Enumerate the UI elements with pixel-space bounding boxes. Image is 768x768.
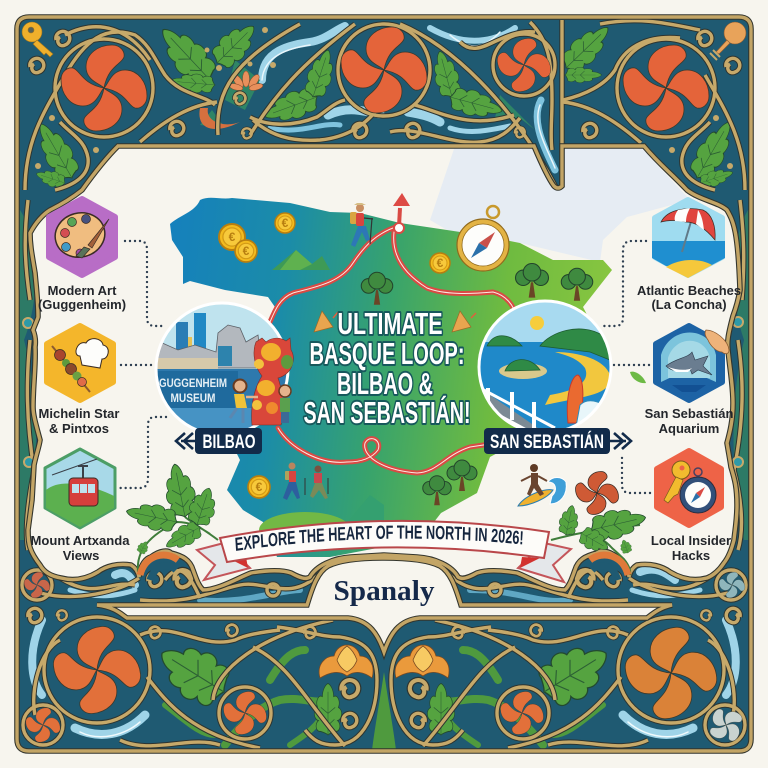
green mid tones bbox=[200, 60, 535, 130]
museum label: GUGGENHEIM bbox=[159, 378, 227, 390]
sea bbox=[480, 342, 610, 428]
side band beads bbox=[23, 317, 743, 467]
category labels: (Guggenheim) bbox=[38, 297, 126, 312]
sun bbox=[530, 316, 544, 330]
compass bbox=[694, 468, 702, 476]
panel: Bilbao circle bbox=[156, 303, 293, 439]
icon: compass bbox=[457, 206, 509, 271]
category labels: Hacks bbox=[672, 548, 710, 563]
orange flower scrolls on rail bbox=[140, 555, 628, 580]
brand name: Spanaly bbox=[334, 575, 435, 607]
icon: coins on the map: € bbox=[229, 230, 236, 244]
icon: mountains bbox=[259, 250, 384, 548]
title: SAN SEBASTIÁN! bbox=[304, 395, 470, 430]
map of the Basque region bbox=[170, 198, 612, 557]
shark bbox=[666, 352, 712, 375]
ribbon tails bbox=[197, 543, 250, 580]
beach bbox=[545, 352, 610, 405]
hex icon: beach bbox=[652, 200, 725, 278]
title: BASQUE LOOP: bbox=[310, 336, 464, 371]
gold beads bbox=[35, 27, 733, 169]
icon: coins on the map: € bbox=[256, 480, 263, 494]
key bbox=[672, 461, 690, 479]
pale sky behind the map bbox=[430, 146, 690, 262]
hex icon: insider hacks bbox=[657, 451, 721, 525]
label: San Sebastián bbox=[484, 428, 610, 454]
icon: orange flowers in bottom band bbox=[319, 645, 449, 678]
museum label: MUSEUM bbox=[170, 393, 216, 405]
small island bbox=[630, 372, 646, 383]
hex icon: aquarium bbox=[656, 326, 729, 400]
museum label bbox=[159, 378, 226, 402]
ribbon text: EXPLORE THE HEART OF THE NORTH IN 2026! bbox=[235, 526, 523, 551]
towers bbox=[176, 322, 188, 350]
category labels: Michelin Star bbox=[39, 406, 119, 421]
category labels: (La Concha) bbox=[651, 297, 727, 312]
Guggenheim building bbox=[156, 325, 262, 368]
green swooshes in the bottom band bbox=[165, 650, 603, 745]
icon: surfer bbox=[518, 464, 566, 506]
chef hat bbox=[76, 339, 108, 368]
oak branch right bbox=[551, 503, 649, 575]
arrow: right from San Sebastián bbox=[610, 433, 631, 449]
label: Bilbao: BILBAO bbox=[202, 432, 256, 453]
arrow: left from Bilbao bbox=[176, 433, 195, 449]
category labels: Mount Artxanda bbox=[30, 533, 130, 548]
icon: hiker bbox=[350, 203, 373, 247]
hex icon: pintxos bbox=[47, 326, 113, 400]
lower oak leaves bbox=[161, 648, 607, 748]
dotted connectors bbox=[120, 241, 650, 493]
category labels: San Sebastián bbox=[645, 406, 733, 421]
label: San Sebastián: SAN SEBASTIÁN bbox=[490, 431, 604, 453]
side band green tints bbox=[18, 210, 750, 540]
shell bbox=[705, 330, 729, 354]
hills bbox=[487, 336, 522, 346]
icon: corner key bbox=[22, 22, 53, 57]
icon: corner fork bbox=[710, 22, 746, 60]
route line bbox=[270, 226, 516, 473]
top oak leaves bbox=[29, 16, 741, 190]
palette bbox=[50, 207, 110, 263]
vines bbox=[25, 20, 745, 550]
brush bbox=[88, 219, 109, 248]
category labels: & Pintxos bbox=[49, 421, 109, 436]
icon: free lauburu flower bbox=[576, 472, 618, 514]
category labels: Modern Art bbox=[48, 283, 117, 298]
title: BILBAO & bbox=[337, 366, 433, 401]
skewer bbox=[52, 346, 90, 392]
red curved bud top centre bbox=[199, 108, 240, 129]
title: ULTIMATE bbox=[338, 306, 442, 341]
icon: coins on the map: € bbox=[282, 216, 289, 230]
Puppy flower bear bbox=[252, 338, 293, 425]
icon: coins on the map: € bbox=[243, 244, 250, 258]
icons: party poppers bbox=[314, 311, 476, 332]
icon: hikers bbox=[283, 462, 328, 500]
label: Bilbao bbox=[195, 428, 262, 454]
category labels: Local Insider bbox=[651, 533, 731, 548]
ribbon banner bbox=[195, 520, 573, 584]
hex icon: cable car bbox=[45, 449, 115, 528]
category labels: Atlantic Beaches bbox=[637, 283, 741, 298]
panel: San Sebastián circle bbox=[477, 301, 615, 434]
category labels bbox=[30, 283, 741, 563]
arrow: route heads north bbox=[393, 193, 410, 233]
title bbox=[304, 306, 470, 430]
hex icon: modern art bbox=[49, 199, 115, 275]
icon: trees bbox=[361, 264, 593, 505]
parasol bbox=[682, 218, 692, 252]
children bbox=[230, 380, 291, 423]
category labels: Views bbox=[63, 548, 99, 563]
icon: coins on the map: € bbox=[437, 256, 444, 270]
icon: small orange lotus bbox=[228, 71, 264, 92]
ribbon body bbox=[220, 521, 549, 562]
water bbox=[158, 369, 286, 408]
island bbox=[499, 363, 547, 379]
icon: coins on the map bbox=[219, 213, 450, 498]
surf and bridge bbox=[490, 395, 538, 428]
category labels: Aquarium bbox=[659, 421, 719, 436]
oak branch left bbox=[124, 461, 221, 572]
